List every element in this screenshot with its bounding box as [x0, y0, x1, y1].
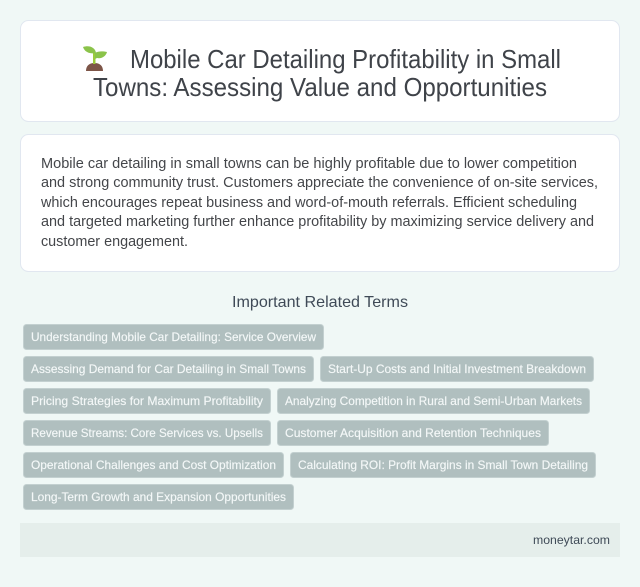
chip: analyzing competition [278, 388, 590, 414]
summary text [40, 156, 598, 250]
summary text: Mobile car detailing in small towns can be highly profitable due to lower competition [41, 156, 577, 172]
chip: pricing strategies [24, 388, 270, 414]
chip: operational challenges: Operational Challenges and Cost Optimization [31, 458, 276, 472]
chip: assessing demand [24, 356, 314, 382]
summary text: customer engagement. [41, 234, 188, 250]
chip: operational challenges [24, 452, 284, 478]
chip: long-term growth: Long-Term Growth and Expansion Opportunities [31, 490, 286, 504]
chip: service overview: Understanding Mobile Car Detailing: Service Overview [31, 330, 316, 344]
summary text: which encourages repeat business and word-of-mouth referrals. Efficient scheduling [40, 195, 577, 211]
chip: assessing demand: Assessing Demand for Car Detailing in Small Towns [31, 362, 306, 376]
chip: customer acquisition: Customer Acquisition and Retention Techniques [285, 426, 541, 440]
chip: calculating ROI: Calculating ROI: Profit Margins in Small Town Detailing [298, 458, 588, 472]
chip: long-term growth [24, 484, 294, 510]
title text [93, 44, 561, 102]
panel: related terms chips [24, 324, 596, 510]
panel: title card [20, 20, 620, 122]
title text: Mobile Car Detailing Profitability in Small [130, 44, 561, 74]
summary text: and targeted marketing further enhance profitability by maximizing service delivery and [41, 214, 594, 230]
icon: seedling [83, 46, 107, 71]
chip: service overview [24, 324, 324, 350]
chip: analyzing competition: Analyzing Competition in Rural and Semi-Urban Markets [285, 394, 582, 408]
chip: start-up costs [320, 356, 594, 382]
chip: calculating ROI [290, 452, 596, 478]
footer bar [20, 523, 620, 557]
title text: Towns: Assessing Value and Opportunities [93, 72, 547, 102]
footer bar: moneytar.com [533, 533, 610, 547]
chip: revenue streams: Revenue Streams: Core Services vs. Upsells [31, 426, 263, 440]
summary text: and strong community trust. Customers appreciate the convenience of on-site services, [41, 175, 598, 191]
chip: start-up costs: Start-Up Costs and Initial Investment Breakdown [328, 362, 586, 376]
heading: related terms: Important Related Terms [232, 294, 408, 311]
chip: pricing strategies: Pricing Strategies for Maximum Profitability [31, 394, 263, 408]
chip: revenue streams [24, 420, 270, 446]
chip: customer acquisition [278, 420, 548, 446]
panel: summary card [20, 134, 620, 272]
